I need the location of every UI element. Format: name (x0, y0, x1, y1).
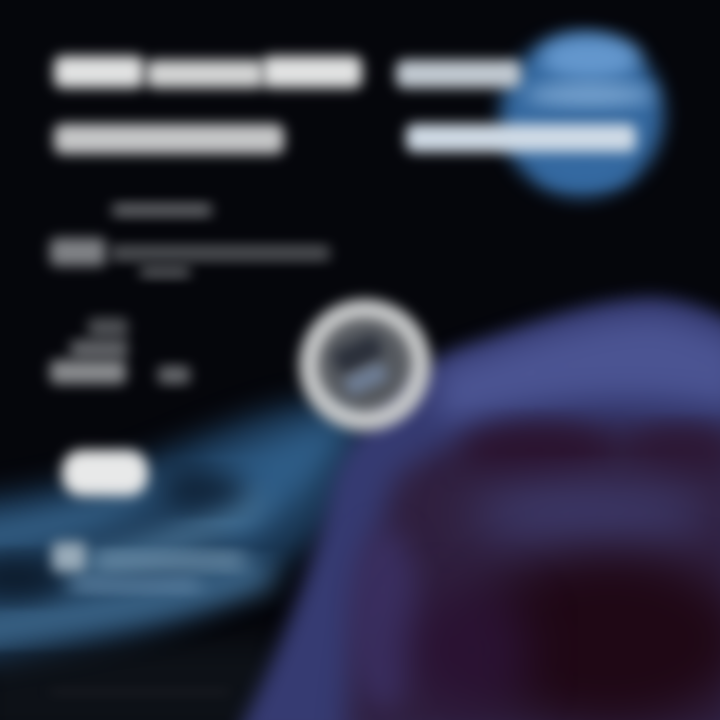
circular ring badge (310, 310, 420, 420)
lower text line 1 (52, 542, 86, 572)
white button (62, 450, 148, 496)
lower text line 2 (95, 552, 245, 570)
intro text block (50, 203, 330, 278)
bottom haze (0, 640, 280, 720)
stat top mark (88, 318, 128, 338)
ring icon (331, 333, 385, 375)
intro main line (50, 238, 106, 266)
title line 1, right part (396, 60, 521, 88)
title line 2, right part (406, 124, 636, 152)
intro secondary line (140, 266, 190, 278)
stat middle mark (70, 340, 128, 358)
large purple planet (235, 298, 720, 720)
title line 1, left part (54, 56, 362, 88)
title line 2, left part (54, 124, 284, 154)
intro main line continuation (110, 245, 330, 261)
stat bottom mark (50, 360, 126, 384)
blue planet (500, 33, 664, 197)
intro small heading (112, 203, 212, 217)
small stat block (50, 318, 190, 384)
stat caption (158, 366, 190, 384)
ring (310, 310, 420, 420)
blue wave band (0, 399, 380, 665)
footer smear (50, 688, 230, 696)
lower text block (52, 542, 245, 592)
title block (54, 56, 636, 154)
lower text line 3 (70, 578, 200, 592)
ring icon lower part (343, 362, 389, 396)
